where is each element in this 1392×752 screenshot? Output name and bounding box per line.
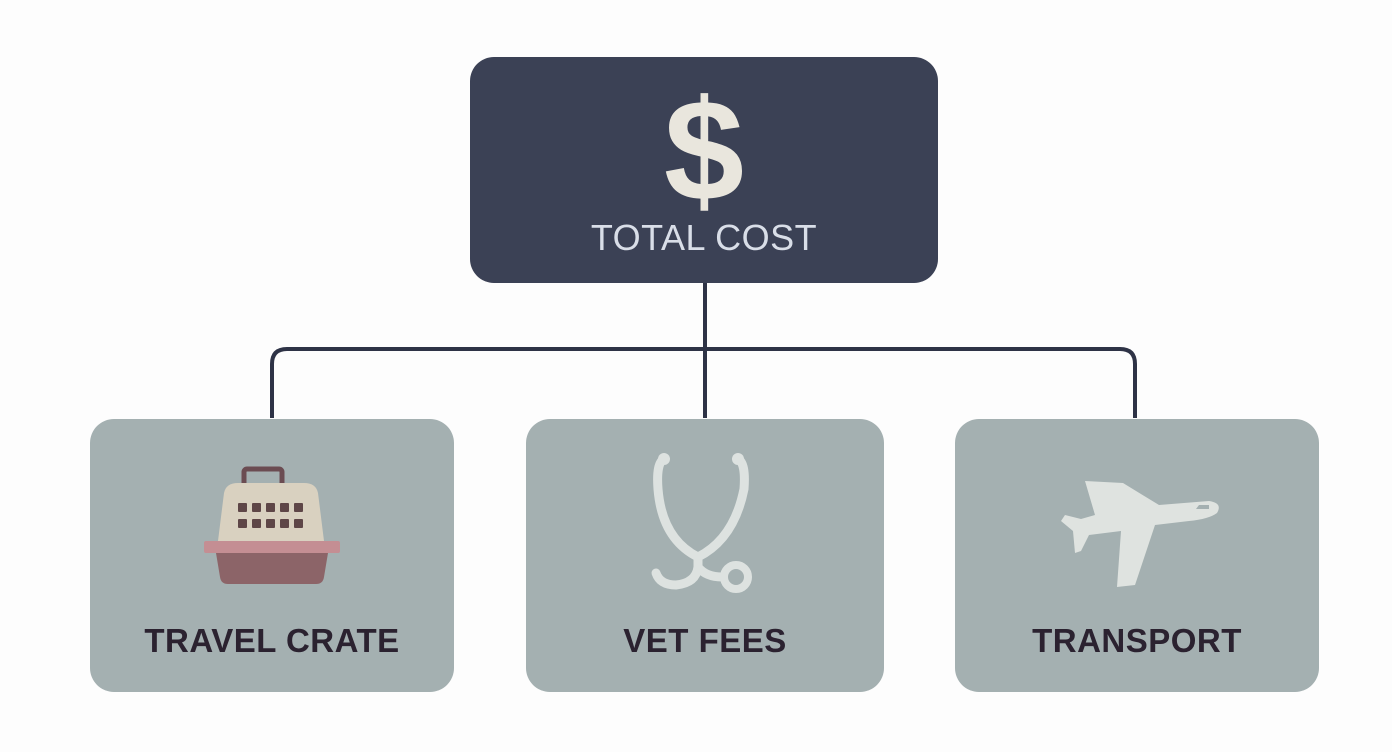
heading: total cost: TOTAL COST (591, 217, 817, 258)
panel: vet fees (526, 419, 884, 692)
label: travel crate: TRAVEL CRATE (144, 622, 400, 659)
icon: dollar sign: $ (664, 70, 744, 231)
icon: stethoscope (652, 453, 752, 593)
label: transport: TRANSPORT (1032, 622, 1242, 659)
panel: total cost (470, 57, 938, 283)
panel: travel crate (90, 419, 454, 692)
icon: airplane (1061, 481, 1219, 587)
panel: transport (955, 419, 1319, 692)
icon: crate (204, 466, 340, 584)
label: vet fees: VET FEES (623, 622, 787, 659)
